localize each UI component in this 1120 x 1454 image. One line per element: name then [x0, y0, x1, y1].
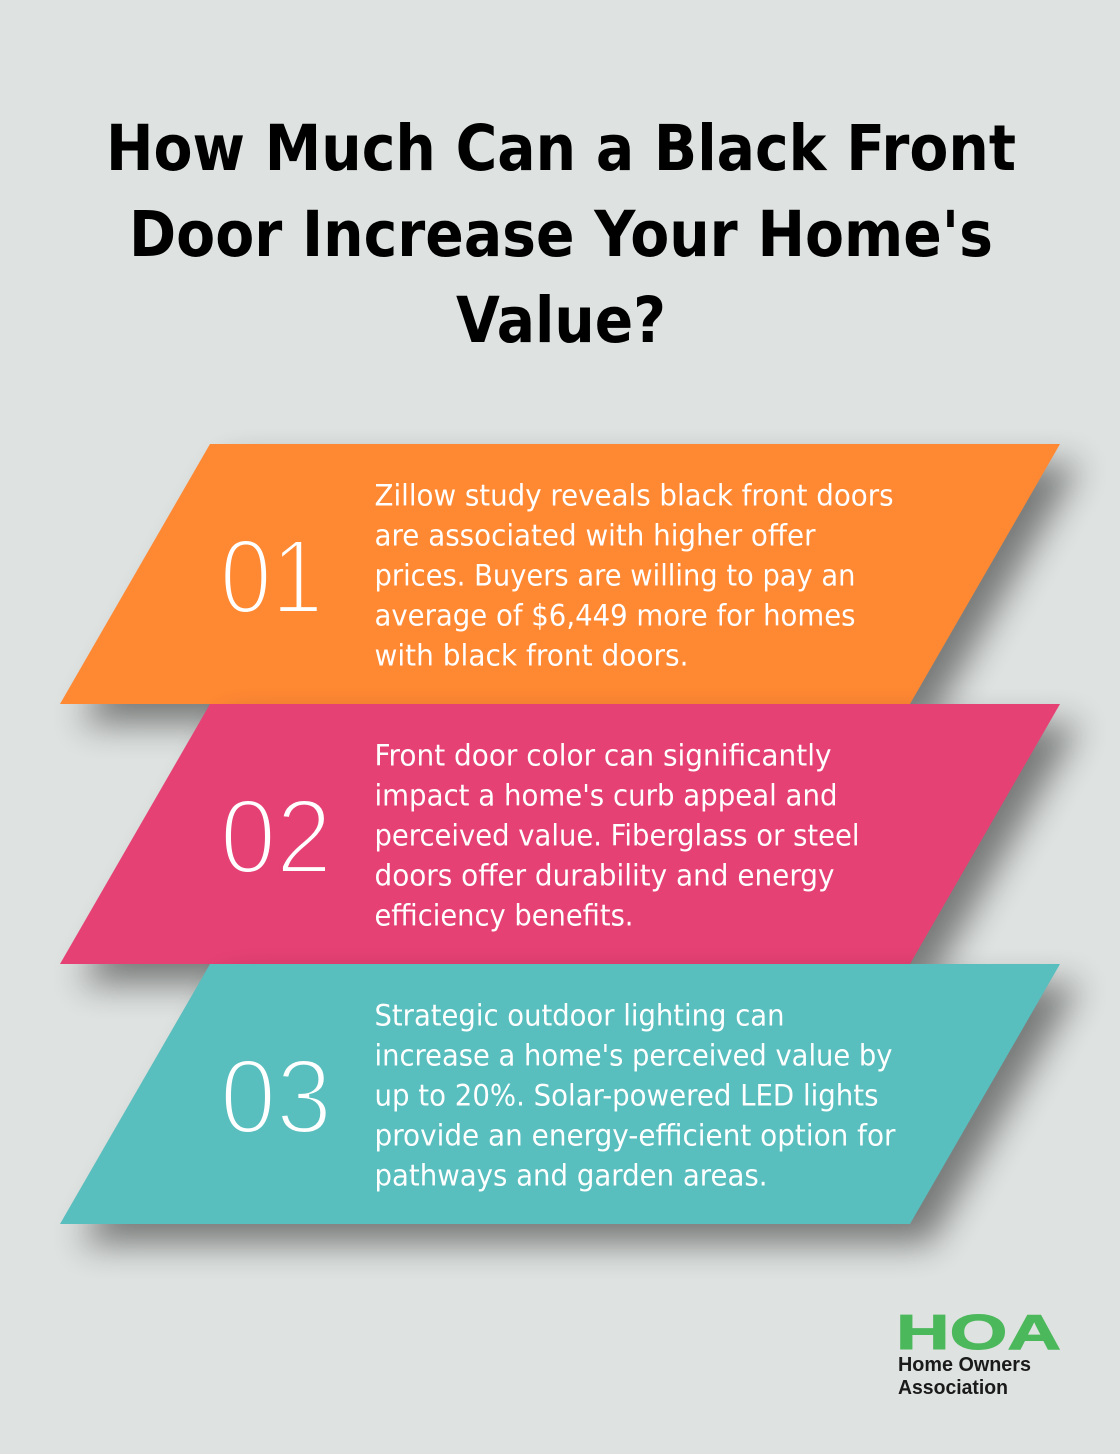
text: step 01 description: are associated with higher offer [374, 518, 816, 552]
panel: step 02 [60, 704, 1080, 984]
text: step 01 description: Zillow study reveals black front doors [374, 478, 894, 512]
text: step 01 description: with black front doors. [374, 638, 688, 672]
text: step 02 description: perceived value. Fiberglass or steel [374, 818, 860, 852]
logo: Home Owners Association: HOA [896, 1306, 1061, 1360]
title: How Much Can a Black Front [106, 112, 1016, 185]
text: step 01 description [374, 478, 894, 672]
text: step 02 description: doors offer durability and energy [374, 858, 834, 892]
panel: step 03 [60, 964, 1080, 1244]
text: step 02 description: impact a home's curb appeal and [374, 778, 838, 812]
text: step 01 description: average of $6,449 more for homes [374, 598, 856, 632]
text: step 02 description: Front door color can significantly [374, 738, 832, 772]
text: step 02 description: efficiency benefits. [374, 898, 634, 932]
logo: Home Owners Association: Home Owners [898, 1354, 1031, 1376]
text: step 03 description: pathways and garden areas. [374, 1158, 768, 1192]
text: step 03 description: Strategic outdoor lighting can [374, 998, 784, 1032]
title: Value? [456, 284, 666, 357]
title: Door Increase Your Home's [129, 198, 993, 271]
number 01: 01 [220, 518, 323, 636]
text: step 02 description [374, 738, 860, 932]
number 02: 02 [220, 778, 332, 896]
logo: Home Owners Association [896, 1306, 1061, 1399]
logo: Home Owners Association: Association [898, 1377, 1008, 1399]
text: step 03 description [374, 998, 896, 1192]
text: step 03 description: up to 20%. Solar-powered LED lights [374, 1078, 878, 1112]
title [106, 112, 1016, 357]
text: step 01 description: prices. Buyers are willing to pay an [374, 558, 856, 592]
panel: step 01 [60, 444, 1080, 724]
text: step 03 description: provide an energy-efficient option for [374, 1118, 896, 1152]
text: step 03 description: increase a home's perceived value by [374, 1038, 892, 1072]
number 03: 03 [220, 1038, 332, 1156]
